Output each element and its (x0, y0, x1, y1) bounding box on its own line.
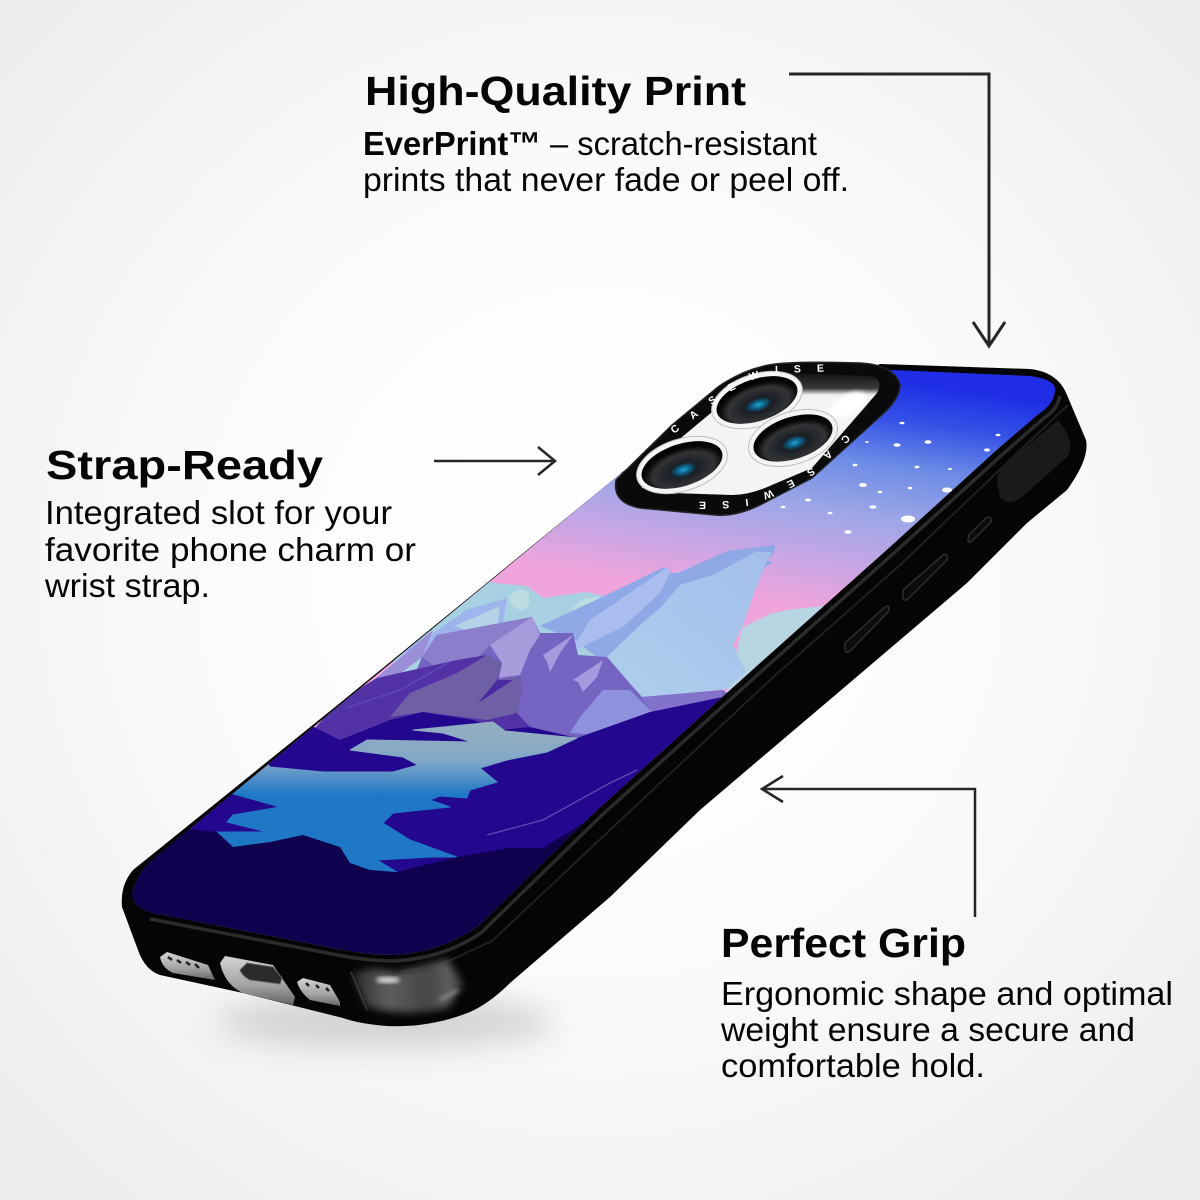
body text line three: wrist strap. (44, 567, 210, 604)
phone shadow (215, 996, 555, 1048)
camera ring text bottom: CASEWISE (699, 436, 850, 509)
pale right mountain (726, 606, 824, 694)
grey purple rock (390, 655, 522, 720)
body text line three: comfortable hold. (721, 1047, 985, 1084)
heading: Perfect Grip (721, 920, 966, 966)
back blue slab (400, 598, 507, 660)
mid mountain light flank (373, 630, 433, 680)
callout: perfect grip (720, 920, 1173, 1084)
main mountain facet (573, 567, 670, 648)
case body (122, 364, 1087, 1026)
body text: Integrated slot for your (45, 494, 392, 531)
right speaker (297, 978, 340, 1006)
phone case (122, 364, 1087, 1026)
stars (780, 422, 1000, 534)
heading: Strap-Ready (46, 442, 323, 488)
body text: EverPrint™ – scratch-resistant (363, 125, 817, 162)
body text line two: weight ensure a secure and (720, 1011, 1135, 1048)
body text line two: prints that never fade or peel off. (363, 161, 849, 198)
side switch (968, 517, 991, 542)
rock dark sliver (478, 680, 513, 703)
mid mountain right band (636, 690, 723, 713)
camera bezel (616, 362, 900, 515)
arrow: strap (434, 447, 555, 475)
volume button lower (845, 606, 889, 652)
callout: strap-ready (44, 442, 416, 604)
arrow: print (789, 74, 1005, 346)
lens right (741, 399, 845, 477)
right speaker holes (306, 983, 329, 991)
deep blue valley (132, 697, 722, 924)
pale back mountains (393, 572, 680, 672)
bezel ridge (150, 396, 1060, 961)
charging port (220, 956, 295, 1005)
camera ring text top: CASEWISE (671, 364, 824, 432)
left speaker (160, 952, 215, 980)
camera island (614, 362, 901, 516)
body text line two: favorite phone charm or (45, 531, 416, 568)
left speaker holes (168, 957, 199, 968)
arrow: grip (762, 776, 975, 917)
lake (217, 722, 577, 872)
slab light face (456, 606, 500, 630)
sky (132, 370, 1056, 955)
lens left (629, 426, 735, 504)
mid mountain upper tone (422, 617, 532, 670)
foreground shore (132, 822, 584, 955)
thin ridge lines (346, 662, 637, 835)
camera window (642, 373, 880, 495)
mid mountain light patch (490, 617, 540, 678)
printed artwork (132, 370, 1056, 955)
outer ridge highlight (403, 405, 1068, 971)
lens top (704, 361, 810, 439)
dark purple left mountain (315, 655, 530, 740)
corner gloss (351, 959, 464, 1013)
volume button upper (903, 555, 948, 600)
body text: Ergonomic shape and optimal (721, 975, 1173, 1012)
main mountain light face (607, 552, 772, 699)
mid mountain front patch (570, 690, 653, 734)
back mountain snow patches (508, 590, 600, 611)
purple mid mountain (417, 617, 727, 738)
heading: High-Quality Print (365, 68, 746, 114)
side slot (997, 420, 1070, 502)
main mountain shadow side (540, 545, 775, 657)
flash (826, 387, 870, 423)
callout: high-quality print (363, 68, 849, 198)
charging port hole (240, 963, 282, 984)
mid mountain small patches (543, 635, 603, 692)
